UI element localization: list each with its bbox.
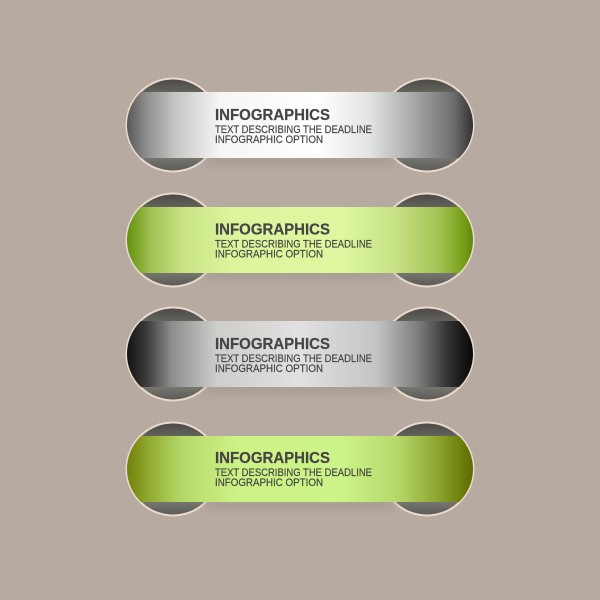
left circle cutout 1 [126,78,220,172]
text block 1: TEXT DESCRIBING THE DEADLINE [215,124,372,136]
text block 3: TEXT DESCRIBING THE DEADLINE [215,353,372,365]
text block 3: INFOGRAPHIC OPTION [215,363,323,375]
band shadow 4 [205,499,395,508]
band shadow 3 [205,384,395,393]
left circle cutout 2 [126,194,220,286]
text block 3: INFOGRAPHICS [215,336,330,353]
band shadow 1 [205,155,395,164]
left circle cutout 3 [126,308,220,400]
silver band 3 [126,321,474,387]
panel: row 1 silver [126,78,474,172]
text block 4: INFOGRAPHICS [215,450,330,467]
band shadow 2 [205,270,395,279]
text block 4 [215,450,372,489]
right circle cutout 3 [380,308,474,400]
left circle cutout 4 [126,422,220,516]
text block 2 [215,222,372,260]
text block 4: TEXT DESCRIBING THE DEADLINE [215,467,372,479]
panel: row 3 dark silver [126,308,474,400]
text block 2: INFOGRAPHICS [215,222,330,238]
text block 1 [215,107,372,146]
text block 3 [215,336,372,375]
text block 2: TEXT DESCRIBING THE DEADLINE [215,238,372,250]
green band 2 [126,207,474,273]
text block 1: INFOGRAPHICS [215,107,330,124]
right circle cutout 2 [380,194,474,286]
text block 4: INFOGRAPHIC OPTION [215,477,323,489]
right circle cutout 4 [380,422,474,516]
panel: row 4 lime [126,422,474,516]
right circle cutout 1 [380,78,474,172]
lime band 4 [126,436,474,502]
silver band 1 [126,92,474,158]
text block 2: INFOGRAPHIC OPTION [215,248,323,260]
text block 1: INFOGRAPHIC OPTION [215,134,323,146]
panel: row 2 green [126,194,474,286]
